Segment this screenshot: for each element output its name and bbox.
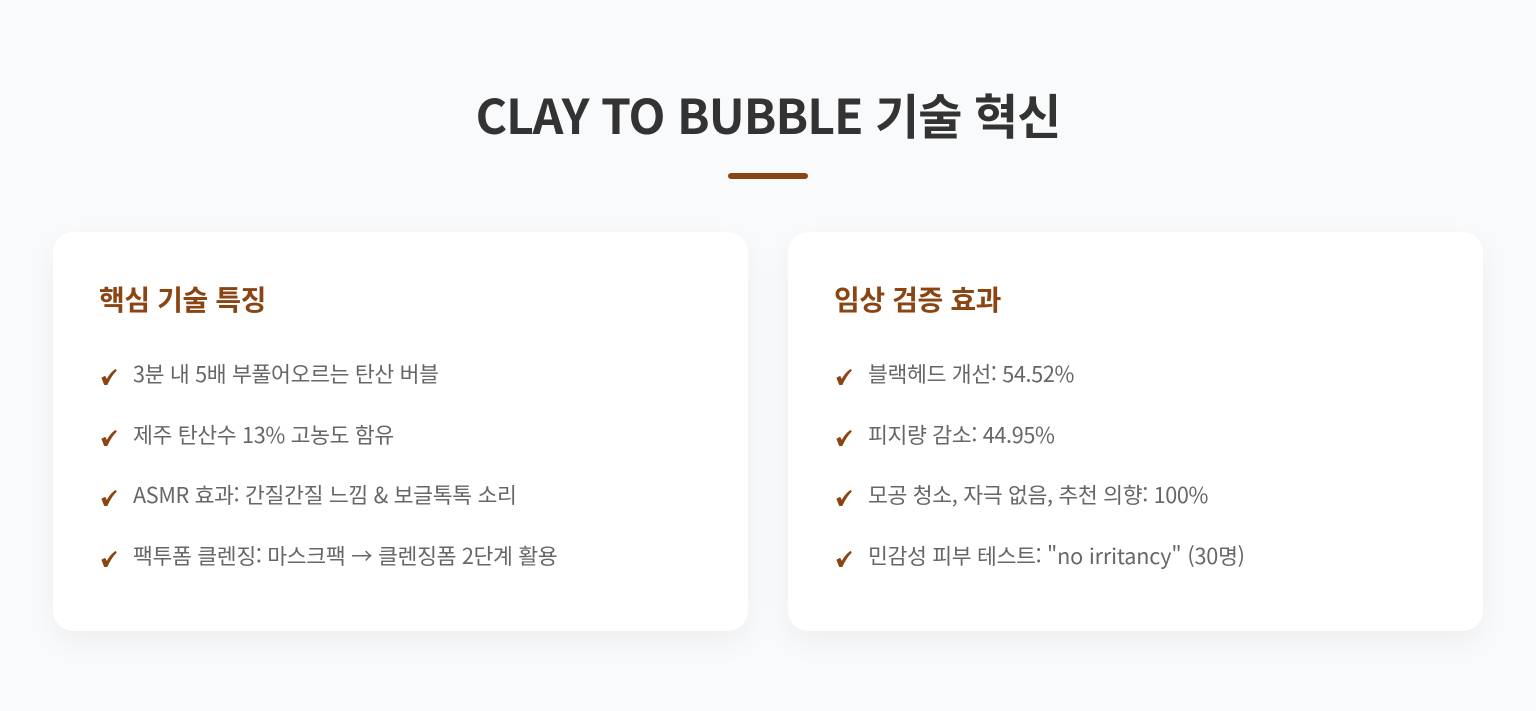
title underline: [728, 173, 808, 179]
panel heading: 임상 검증 효과: [834, 279, 1001, 319]
list item: carbonated bubble: 3분 내 5배 부풀어오르는 탄산 버블: [133, 358, 439, 389]
panel: core technology features: [53, 232, 748, 631]
list item: pore cleansing and recommendation: 모공 청소, 자극 없음, 추천 의향: 100%: [868, 479, 1208, 510]
list item: ASMR effect: ASMR 효과: 간질간질 느낌 & 보글톡톡 소리: [133, 479, 517, 510]
panel heading: 핵심 기술 특징: [99, 279, 266, 319]
list item: sensitive skin test: 민감성 피부 테스트: "no irritancy" (30명): [868, 540, 1245, 571]
panel: clinically verified effects: [788, 232, 1483, 631]
list item: Jeju carbonated water: 제주 탄산수 13% 고농도 함유: [133, 419, 394, 450]
title: CLAY TO BUBBLE 기술 혁신: [476, 78, 1060, 148]
list item: blackhead improvement: 블랙헤드 개선: 54.52%: [868, 358, 1074, 389]
list item: sebum reduction: 피지량 감소: 44.95%: [868, 419, 1055, 450]
list item: pack-to-foam cleansing: 팩투폼 클렌징: 마스크팩 → 클렌징폼 2단계 활용: [133, 540, 557, 571]
